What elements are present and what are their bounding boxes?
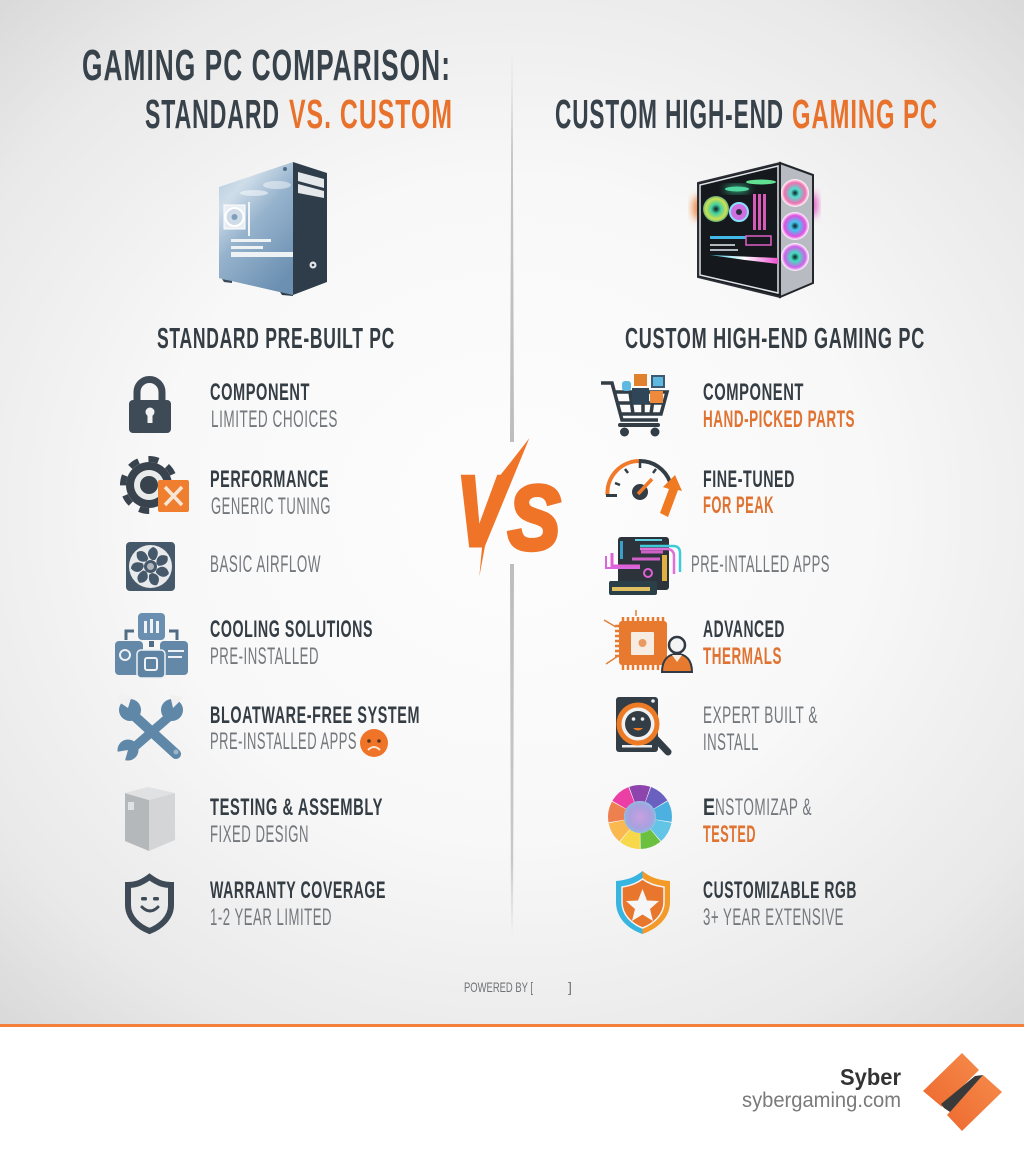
feature: component: COMPONENT [703,379,804,406]
footer logo [923,1053,1002,1131]
footer band [0,1024,1024,1154]
icon: cooling network [115,613,188,678]
footer brand: sybergaming.com [742,1089,901,1112]
feature: component: HAND-PICKED PARTS [703,406,855,433]
icon: circuit board with tubing [606,537,680,595]
feature: component [703,379,855,433]
title: left [82,41,453,137]
icon: CPU chip with person [604,610,692,672]
panel: standard PC features [115,379,420,931]
title: left: STANDARD [145,91,280,137]
feature: warranty coverage: 1-2 YEAR LIMITED [210,904,332,931]
VS badge: V [457,458,509,567]
feature: performance [210,466,331,520]
centre divider [510,50,514,936]
feature: testing and assembly: FIXED DESIGN [210,821,309,848]
feature: component: COMPONENT [210,379,310,406]
title: left: VS. CUSTOM [289,91,453,137]
icon: smiling shield [128,877,171,931]
feature: fine-tuned [703,466,795,519]
icon: crossed wrenches [116,693,184,764]
icon: inspection magnifier [616,697,668,752]
heading: standard pre-built PC: STANDARD PRE-BUILT PC [157,323,395,355]
powered by note: POWERED BY [ [464,979,533,995]
footer brand [742,1064,901,1112]
feature: basic airflow: BASIC AIRFLOW [210,551,321,578]
footer brand: Syber [840,1064,901,1090]
feature: advanced thermals: THERMALS [703,643,782,670]
powered by note: ] [568,979,572,995]
icon: speedometer with arrow [606,461,682,517]
feature: customized and tested [703,794,812,848]
icon: padlock [129,379,171,433]
feature: bloatware-free system: PRE-INSTALLED APPS [210,728,357,755]
icon: cart with parts [601,374,667,436]
feature: fine-tuned: FOR PEAK [703,492,774,519]
feature: warranty coverage [210,877,386,931]
feature: advanced thermals [703,616,785,670]
feature: testing and assembly [210,794,383,848]
feature: performance: PERFORMANCE [210,466,329,493]
VS badge [457,438,560,577]
feature: performance: GENERIC TUNING [211,493,331,520]
icon: star shield [616,871,670,934]
illustration: standard PC tower [219,162,327,296]
feature: cooling solutions [210,616,373,670]
feature: bloatware-free system [210,702,420,755]
feature: expert built and install [703,702,818,756]
feature: cooling solutions: PRE-INSTALLED [210,643,319,670]
feature: fine-tuned: FINE-TUNED [703,466,795,493]
VS badge: S [508,466,560,568]
feature: pre-installed apps: PRE-INTALLED APPS [691,551,830,578]
feature: customizable RGB: 3+ YEAR EXTENSIVE [703,904,844,931]
icon: case fan [126,542,175,591]
panel: custom PC features [601,374,857,934]
icon: sad face [360,729,388,757]
feature: advanced thermals: ADVANCED [703,616,785,643]
title: left: GAMING PC COMPARISON: [82,41,451,90]
feature: warranty coverage: WARRANTY COVERAGE [210,877,386,904]
icon: RGB colour wheel [606,783,674,851]
feature: bloatware-free system: BLOATWARE-FREE SYSTEM [210,702,420,729]
feature: customizable RGB [703,877,857,931]
illustration: custom gaming PC [693,163,817,297]
feature: customizable RGB: CUSTOMIZABLE RGB [703,877,857,904]
feature: testing and assembly: TESTING & ASSEMBLY [210,794,383,821]
feature: cooling solutions: COOLING SOLUTIONS [210,616,373,643]
feature: expert built and install: INSTALL [703,729,759,756]
feature: customized and tested: TESTED [703,821,756,848]
feature: component [210,379,338,433]
feature: customized and tested: E [703,794,715,821]
icon: plain box [125,787,175,851]
feature: component: LIMITED CHOICES [211,406,338,433]
icon: gear with X [123,459,189,512]
title: right: CUSTOM HIGH-END [555,91,784,137]
feature: customized and tested: NSTOMIZAP & [715,794,812,821]
feature: expert built and install: EXPERT BUILT & [703,702,818,729]
